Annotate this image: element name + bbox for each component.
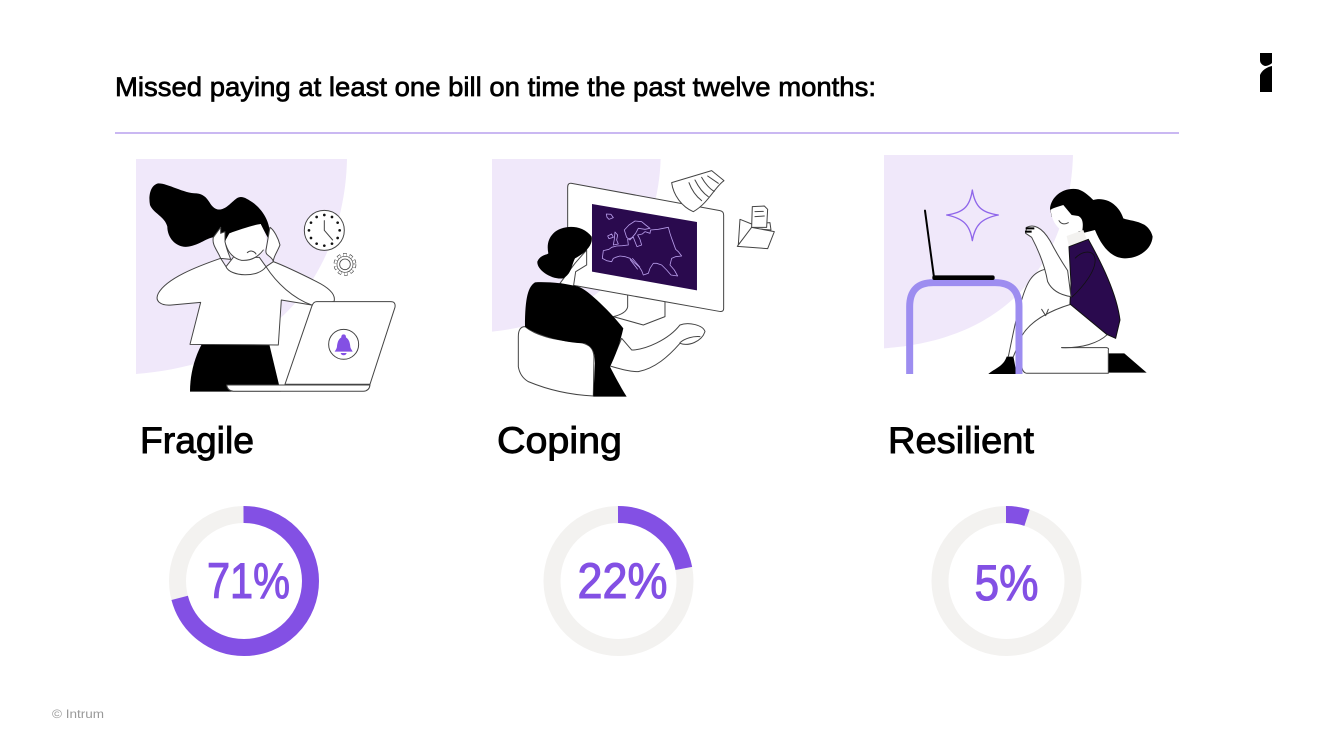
donut: fragile 71% [178,514,310,648]
laptop [227,302,395,391]
woman: body [525,282,627,397]
monitor stand [613,293,665,325]
shoe [988,356,1017,374]
woman: neck and collar [226,257,266,275]
monitor [568,183,724,312]
chair [518,327,594,396]
donut: coping 22%: 22% [578,553,668,609]
sparkle icon [947,190,998,241]
woman: shirt and arms [157,258,334,345]
woman: neck [1067,230,1087,247]
woman: hair [1050,189,1153,258]
donut: coping 22% [552,514,685,648]
woman: top [1069,239,1120,338]
lavender backdrop [136,159,347,374]
lavender backdrop [492,159,661,332]
illustration: fragile [136,159,395,392]
label: fragile: Fragile [140,420,254,461]
woman: face [1051,205,1083,233]
woman: legs and cushion [1008,269,1109,373]
woman: hair [149,183,270,247]
illustration: resilient [884,155,1153,374]
icon: bell [335,334,353,355]
table [910,283,1019,374]
illustration: coping [492,159,774,397]
donut: resilient 5% [940,514,1073,648]
label: resilient: Resilient [888,420,1035,461]
gear icon [336,255,354,274]
woman: arm and hand [610,324,705,372]
falling paper [672,171,724,212]
woman: neck and face [560,250,587,287]
woman: trousers [190,344,281,392]
woman: face [225,224,266,260]
woman: hands [213,227,231,259]
laptop [925,211,995,280]
lavender backdrop [884,155,1073,348]
footer copyright: © Intrum [52,707,104,721]
woman: arm [1026,226,1071,297]
screen with map of Europe [592,204,697,290]
donut: resilient 5%: 5% [974,555,1038,611]
back shoe [1108,353,1147,373]
folder icon [737,206,774,249]
logo [1260,53,1272,92]
label: coping: Coping [497,420,622,461]
woman: hair [537,227,592,279]
clock icon [304,210,344,250]
title: Missed paying at least one bill on time the past twelve months: [115,72,876,102]
donut: fragile 71%: 71% [207,553,290,609]
woman: eye [1059,221,1068,224]
